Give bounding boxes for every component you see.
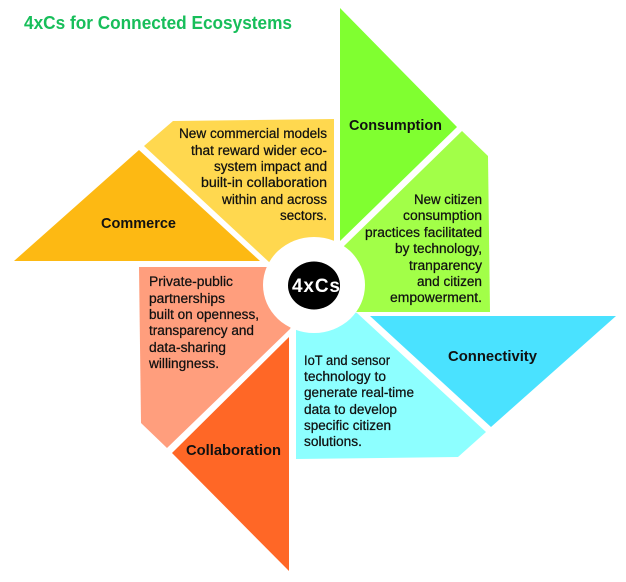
- panel: collaboration description: built on openness,: [149, 307, 259, 322]
- panel: commerce triangle: Commerce: [101, 215, 176, 232]
- panel: collaboration triangle: Collaboration: [186, 442, 281, 459]
- panel: collaboration description: data-sharing: [149, 340, 226, 355]
- panel: connectivity triangle: [370, 316, 616, 427]
- panel: collaboration description: willingness.: [148, 356, 219, 371]
- panel: consumption triangle: Consumption: [349, 117, 442, 134]
- panel: consumption description: and citizen: [417, 274, 482, 289]
- panel: collaboration triangle: [172, 337, 289, 571]
- panel: consumption description: empowerment.: [390, 290, 482, 305]
- panel: collaboration description: Private-public: [149, 274, 233, 289]
- center hub: 4xCs: 4xCs: [292, 276, 340, 297]
- panel: commerce description: built-in collaboration: [201, 175, 327, 190]
- panel: commerce description: within and across: [221, 192, 327, 207]
- panel: consumption description: by technology,: [395, 241, 482, 256]
- panel: consumption description: New citizen: [414, 192, 482, 207]
- panel: connectivity description: generate real-time: [304, 385, 414, 400]
- panel: consumption description: tranparency: [409, 258, 482, 273]
- panel: connectivity description: [296, 300, 486, 459]
- panel: connectivity description: technology to: [304, 369, 386, 384]
- panel: connectivity triangle: Connectivity: [448, 348, 538, 365]
- panel: connectivity description: solutions.: [304, 434, 362, 449]
- panel: commerce triangle: [14, 150, 260, 261]
- panel: commerce description: [144, 119, 334, 270]
- panel: collaboration description: transparency and: [149, 323, 254, 338]
- panel: commerce description: that reward wider eco-: [191, 143, 327, 158]
- panel: connectivity description: data to develop: [304, 402, 397, 417]
- panel: commerce description: system impact and: [214, 159, 327, 174]
- panel: connectivity description: IoT and sensor: [304, 353, 390, 368]
- panel: connectivity description: specific citizen: [304, 418, 391, 433]
- center hub: 4xCs: [263, 237, 365, 333]
- title: 4xCs for Connected Ecosystems: [24, 12, 292, 33]
- panel: consumption triangle: [340, 8, 457, 241]
- panel: commerce description: sectors.: [280, 208, 327, 223]
- panel: commerce description: New commercial models: [179, 126, 327, 141]
- panel: collaboration description: partnerships: [149, 291, 225, 306]
- panel: consumption description: [330, 131, 490, 312]
- panel: consumption description: consumption: [403, 208, 482, 223]
- panel: consumption description: practices facilitated: [365, 225, 482, 240]
- panel: collaboration description: [139, 267, 300, 448]
